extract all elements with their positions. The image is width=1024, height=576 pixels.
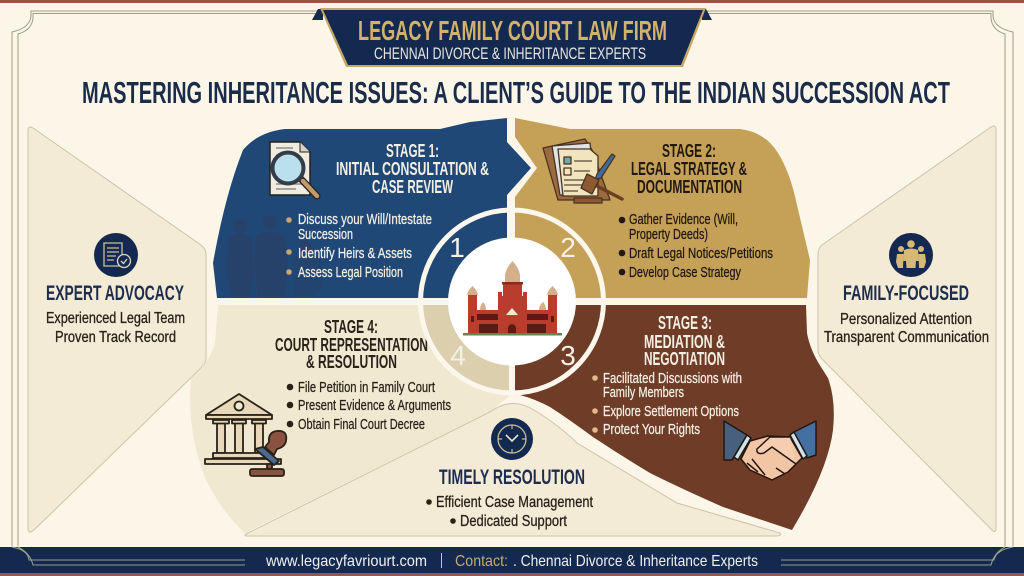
firm name: LEGACY FAMILY COURT LAW FIRM (358, 15, 667, 46)
panel: stage 1 (213, 118, 531, 298)
icon: clock badge (491, 418, 533, 460)
stage 1 title (336, 141, 489, 197)
top accent bar (0, 0, 1024, 3)
footer bar (0, 547, 1024, 576)
panel: expert advocacy (28, 127, 206, 532)
number 1: 1 (449, 232, 465, 263)
footer contact details: . Chennai Divorce & Inheritance Experts (513, 553, 758, 570)
text: family focused lines: Transparent Communication (824, 329, 989, 346)
stage 4 bullets: Present Evidence & Arguments (298, 398, 451, 414)
stage 4 title (275, 317, 428, 372)
stage 4 title: STAGE 4: (324, 317, 378, 337)
text: expert advocacy lines: Proven Track Record (55, 329, 176, 346)
stage 4 bullets (287, 380, 451, 433)
stage 2 bullets: Property Deeds) (629, 227, 708, 243)
text: expert advocacy lines (46, 310, 185, 346)
stage 1 title: INITIAL CONSULTATION & (336, 159, 489, 179)
banner (312, 8, 712, 67)
panel: stage 3 (515, 305, 834, 530)
footer website: www.legacyfavriourt.com (265, 553, 427, 570)
heading: expert advocacy: EXPERT ADVOCACY (46, 282, 184, 305)
panel: stage 4 (190, 305, 509, 533)
stage 3 bullets (592, 371, 742, 438)
heading: timely resolution: TIMELY RESOLUTION (439, 466, 585, 489)
decorative silhouettes of legal team (226, 215, 323, 297)
stage 2 title: STAGE 2: (662, 141, 716, 161)
stage 1 title: CASE REVIEW (372, 177, 453, 197)
stage 3 title: NEGOTIATION (644, 349, 725, 369)
center court building (448, 238, 576, 366)
stage 1 bullets: Discuss your Will/Intestate (298, 212, 432, 228)
text: family focused lines: Personalized Attention (840, 311, 972, 328)
stage 2 title: DOCUMENTATION (637, 177, 742, 197)
stage 3 title: MEDIATION & (644, 332, 725, 352)
text: timely resolution bullets: Dedicated Support (460, 513, 567, 530)
firm tagline: CHENNAI DIVORCE & INHERITANCE EXPERTS (374, 44, 646, 63)
icon: papers, pen and gavel (543, 139, 622, 203)
stage 2 title: LEGAL STRATEGY & (631, 159, 747, 179)
stage 2 bullets: Develop Case Strategy (629, 265, 742, 281)
stage 1 bullets: Assess Legal Position (298, 265, 403, 281)
panel: family focused (818, 126, 996, 532)
stage ring with numbers (420, 205, 604, 395)
stage 2 title (631, 141, 747, 197)
text: timely resolution bullets: Efficient Case Management (436, 494, 593, 511)
stage 4 title: COURT REPRESENTATION (275, 335, 428, 355)
stage 3 bullets: Explore Settlement Options (603, 404, 739, 420)
heading: family focused: FAMILY-FOCUSED (843, 282, 969, 305)
number 2: 2 (560, 232, 576, 263)
icon: family badge (889, 233, 933, 277)
stage 2 bullets: Gather Evidence (Will, (629, 212, 738, 228)
text: family focused lines (824, 311, 989, 346)
stage 3 title (644, 313, 725, 369)
stage 1 bullets (286, 212, 432, 281)
stage 3 bullets: Protect Your Rights (603, 422, 700, 438)
stage 3 bullets: Family Members (603, 385, 684, 401)
stage 1 title: STAGE 1: (386, 141, 439, 161)
icon: checklist badge (94, 233, 138, 277)
stage 4 bullets: Obtain Final Court Decree (298, 417, 425, 433)
text: timely resolution bullets (427, 494, 593, 530)
panel: stage 2 (515, 118, 810, 298)
stage 2 bullets (619, 212, 773, 281)
footer contact: Contact: (455, 553, 508, 570)
stage 3 bullets: Facilitated Discussions with (603, 371, 742, 387)
stage 4 bullets: File Petition in Family Court (298, 380, 435, 396)
stage 3 title: STAGE 3: (658, 313, 712, 333)
stage 2 bullets: Draft Legal Notices/Petitions (629, 246, 773, 262)
icon: courthouse and stamp (205, 394, 286, 476)
stage 4 title: & RESOLUTION (306, 352, 397, 372)
stage 1 bullets: Identify Heirs & Assets (298, 246, 412, 262)
number 3: 3 (560, 340, 576, 371)
text: expert advocacy lines: Experienced Legal Team (46, 310, 185, 327)
stage 1 bullets: Succession (298, 227, 353, 243)
icon: document and magnifier (270, 142, 317, 196)
panel: timely resolution (245, 403, 780, 536)
number 4: 4 (450, 340, 466, 371)
icon: handshake (724, 421, 816, 480)
